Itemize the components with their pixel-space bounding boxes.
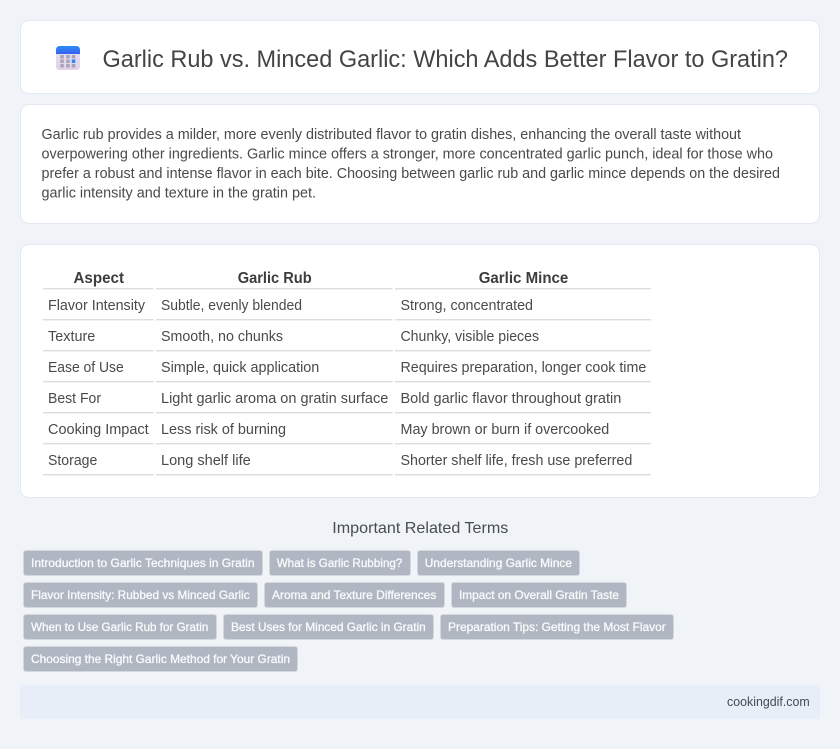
table row: texture: Texture [48,329,95,345]
panel: title [20,20,820,94]
related term tags: Flavor Intensity: Rubbed vs Minced Garlic [31,588,250,602]
table header row: Garlic Rub [238,270,312,287]
related term tags: Best Uses for Minced Garlic in Gratin [231,620,426,634]
panel: summary paragraph: Garlic rub provides a milder, more evenly distributed flavor to gratin dishes, enhancing the overall taste without [42,127,741,143]
table row: flavor intensity [48,298,533,314]
table header row: Aspect [74,270,125,287]
table row: cooking impact: May brown or burn if overcooked [400,422,609,438]
table header row [74,270,568,287]
table row: flavor intensity: Flavor Intensity [48,298,146,314]
table row: best for: Light garlic aroma on gratin surface [161,391,388,407]
footer: cookingdif.com [727,695,810,709]
related term tags [24,550,674,672]
table row: cooking impact: Less risk of burning [161,422,286,438]
table row: best for [48,391,621,407]
related term tags: Understanding Garlic Mince [425,556,572,570]
related term tags: Impact on Overall Gratin Taste [459,588,619,602]
table row: texture [48,329,539,345]
table row: storage: Shorter shelf life, fresh use preferred [400,453,632,469]
related term tags: What is Garlic Rubbing? [277,556,403,570]
related term tags: Introduction to Garlic Techniques in Gratin [31,556,255,570]
heading: important related terms: Important Related Terms [332,520,508,537]
table row: storage [48,453,632,469]
table row: storage: Storage [48,453,97,469]
panel: summary paragraph: prefer a robust and intense flavor in each bite. Choosing between garlic rub and garlic mince depends on the desired [42,166,780,182]
table row: ease of use: Ease of Use [48,360,124,376]
related term tags: Preparation Tips: Getting the Most Flavor [448,620,666,634]
title text: Garlic Rub vs. Minced Garlic: Which Adds Better Flavor to Gratin? [102,46,788,73]
panel: summary paragraph: garlic intensity and texture in the gratin pet. [42,186,316,202]
table row: flavor intensity: Strong, concentrated [400,298,533,314]
table header row: Garlic Mince [479,270,568,287]
table row: storage: Long shelf life [161,453,251,469]
related term tags: Aroma and Texture Differences [272,588,436,602]
table row: ease of use [48,360,646,376]
footer [20,685,820,719]
table row: cooking impact [48,422,609,438]
panel: summary paragraph: overpowering other ingredients. Garlic mince offers a stronger, more concentrated garlic punch, ideal for those who [42,146,773,162]
table row: ease of use: Requires preparation, longer cook time [400,360,646,376]
panel: comparison table [20,244,820,498]
related term tags: Choosing the Right Garlic Method for Your Gratin [31,652,290,666]
table row: flavor intensity: Subtle, evenly blended [161,298,302,314]
table row: texture: Chunky, visible pieces [400,329,539,345]
related term tags: When to Use Garlic Rub for Gratin [31,620,208,634]
table row: texture: Smooth, no chunks [161,329,283,345]
table row: ease of use: Simple, quick application [161,360,319,376]
panel: summary paragraph [20,104,820,224]
table row: best for: Best For [48,391,101,407]
icon: calendar [56,46,80,70]
table row: best for: Bold garlic flavor throughout gratin [400,391,621,407]
table row: cooking impact: Cooking Impact [48,422,149,438]
